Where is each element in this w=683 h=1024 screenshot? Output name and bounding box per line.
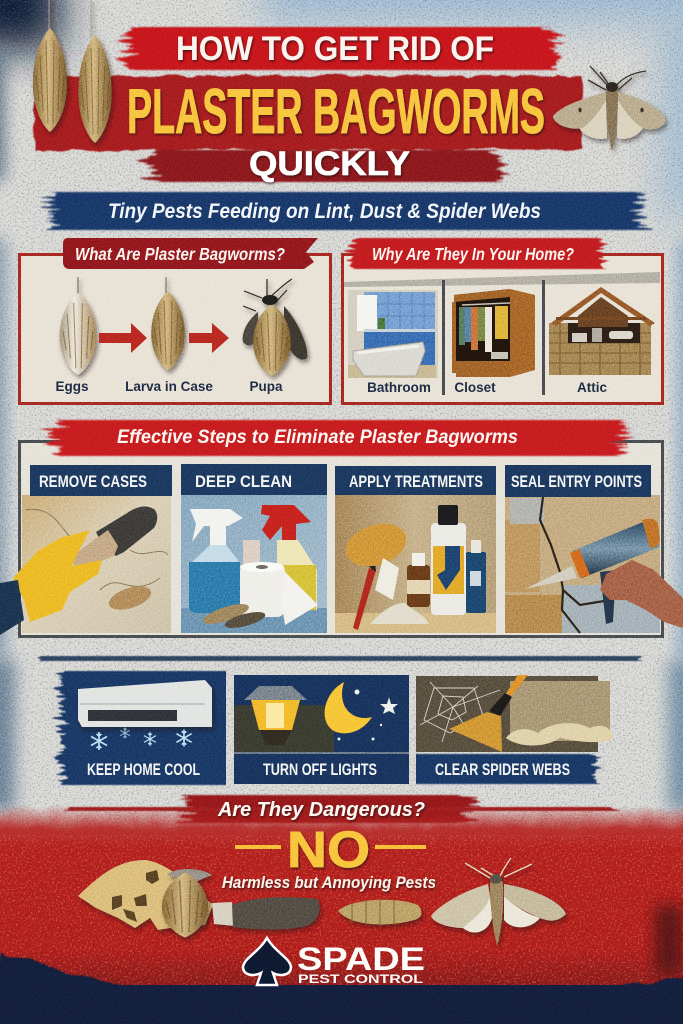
tip title: TURN OFF LIGHTS — [263, 761, 377, 779]
logo: spade pest control — [243, 938, 425, 986]
icon: hanging bagworm cases — [33, 0, 112, 143]
illustration: attic — [549, 287, 655, 375]
banner shape — [50, 192, 640, 230]
heading: are they dangerous: Are They Dangerous? — [217, 799, 425, 821]
arrow: larva to pupa — [189, 323, 229, 353]
icon: vacuum nozzle — [96, 506, 157, 556]
red paint area — [0, 806, 683, 996]
banner: plaster bagworms — [34, 76, 582, 150]
icon: white cloth — [375, 558, 399, 600]
step title: SEAL ENTRY POINTS — [511, 472, 642, 491]
icon: yellow glove — [13, 530, 102, 622]
tip card: keep home cool — [60, 671, 240, 785]
icon: case with wings — [162, 869, 212, 938]
decorative line — [42, 656, 642, 661]
illustration: closet — [454, 289, 535, 377]
step card: deep clean — [181, 464, 327, 633]
panel: why are they in your home — [342, 238, 662, 404]
divider: bathroom and closet — [442, 280, 445, 395]
heading: effective steps: Effective Steps to Eliminate Plaster Bagworms — [117, 426, 518, 448]
divider: closet and attic — [542, 280, 545, 395]
icon: moth top right — [553, 66, 666, 151]
panel: what are plaster bagworms — [20, 238, 330, 404]
rule right — [375, 845, 426, 849]
icon: spider web — [420, 682, 500, 742]
step header — [30, 465, 172, 496]
icon: sleeve — [0, 580, 24, 635]
heading: quickly: QUICKLY — [249, 145, 410, 183]
icon: amber bottle — [407, 553, 430, 607]
icon: stars — [338, 690, 398, 740]
icon: chewed paper — [78, 860, 213, 930]
navy base edge — [0, 953, 683, 1024]
step card: remove cases — [0, 465, 172, 635]
icon: bagworm case on wall — [106, 582, 154, 614]
icon: spade — [243, 938, 291, 985]
icon: white bottle — [431, 505, 466, 615]
heading: how to get rid of: HOW TO GET RID OF — [176, 30, 494, 68]
panel heading banner — [63, 238, 318, 269]
step title: DEEP CLEAN — [195, 472, 292, 491]
icon: ribbed case — [338, 900, 421, 926]
panel: effective steps frame — [0, 420, 683, 636]
icon: broom — [449, 675, 528, 752]
panel heading banner — [352, 238, 602, 269]
icon: small bottle — [243, 540, 260, 566]
icon: dark larval tube — [212, 897, 320, 930]
banner: quickly — [150, 150, 500, 182]
rule left — [235, 845, 281, 849]
step title: REMOVE CASES — [39, 472, 147, 491]
banner: how to get rid of — [128, 27, 555, 70]
paint speckle — [0, 835, 683, 985]
illustration: bathroom — [348, 290, 438, 378]
label: closet: Closet — [454, 380, 496, 395]
label: larva in case: Larva in Case — [125, 379, 213, 394]
icon: caulk nozzle — [525, 566, 577, 589]
step card: apply treatments — [335, 466, 496, 633]
tip card: clear spider webs — [400, 675, 612, 784]
dark shade right — [655, 905, 683, 975]
icon: eggs in case — [60, 277, 96, 375]
icon: caulk gun — [570, 519, 660, 624]
logo wordmark: SPADE — [297, 941, 425, 977]
label: eggs: Eggs — [55, 379, 89, 394]
icon: snowflakes — [91, 728, 192, 750]
icon: crescent moon — [325, 682, 372, 733]
icon: dust clumps — [506, 723, 612, 746]
subtitle banner — [50, 192, 640, 230]
panel heading text: What Are Plaster Bagworms? — [75, 244, 285, 264]
step card: seal entry points — [505, 465, 683, 633]
tip title: CLEAR SPIDER WEBS — [435, 761, 570, 779]
icon: lantern — [244, 686, 307, 745]
arrow: eggs to larva — [99, 323, 147, 353]
tip card: turn off lights — [234, 675, 409, 784]
crack marks — [25, 509, 168, 590]
step title: APPLY TREATMENTS — [349, 472, 483, 491]
label: attic: Attic — [577, 380, 607, 395]
banner: effective steps — [52, 420, 622, 456]
icon: pale moth — [431, 858, 566, 946]
panel: are they dangerous — [0, 795, 683, 1024]
icon: larva in case — [151, 277, 185, 370]
step header — [335, 466, 496, 495]
icon: duster brush — [340, 516, 412, 630]
tip title: KEEP HOME COOL — [87, 761, 200, 779]
icon: powder pile — [370, 603, 429, 624]
icon: red spray bottle — [261, 505, 317, 610]
ceiling band — [344, 272, 660, 287]
icon: hand — [600, 560, 683, 628]
icon: air conditioner — [78, 680, 212, 727]
subtitle text: Tiny Pests Feeding on Lint, Dust & Spider Webs — [108, 200, 541, 223]
step header — [181, 464, 327, 495]
icon: blue spray bottle — [189, 509, 243, 613]
dusty wall — [510, 681, 610, 741]
icon: pupa with wings — [243, 279, 307, 376]
label: pupa: Pupa — [249, 379, 283, 394]
icon: bagworm cases — [201, 600, 267, 631]
title banners — [34, 27, 582, 183]
navy base fill — [0, 962, 683, 1024]
icon: blue bottle — [466, 540, 486, 613]
answer: no: NO — [287, 821, 370, 878]
text: harmless but annoying pests: Harmless but Annoying Pests — [222, 874, 436, 892]
label: bathroom: Bathroom — [367, 380, 431, 395]
logo subtitle: PEST CONTROL — [298, 974, 423, 986]
panel heading text: Why Are They In Your Home? — [372, 244, 574, 264]
icon: paper roll — [240, 562, 318, 625]
step header — [505, 465, 651, 497]
top strip — [185, 795, 470, 823]
wall crack — [540, 497, 610, 633]
icon: collected cases — [72, 530, 118, 566]
streaks — [70, 807, 615, 811]
